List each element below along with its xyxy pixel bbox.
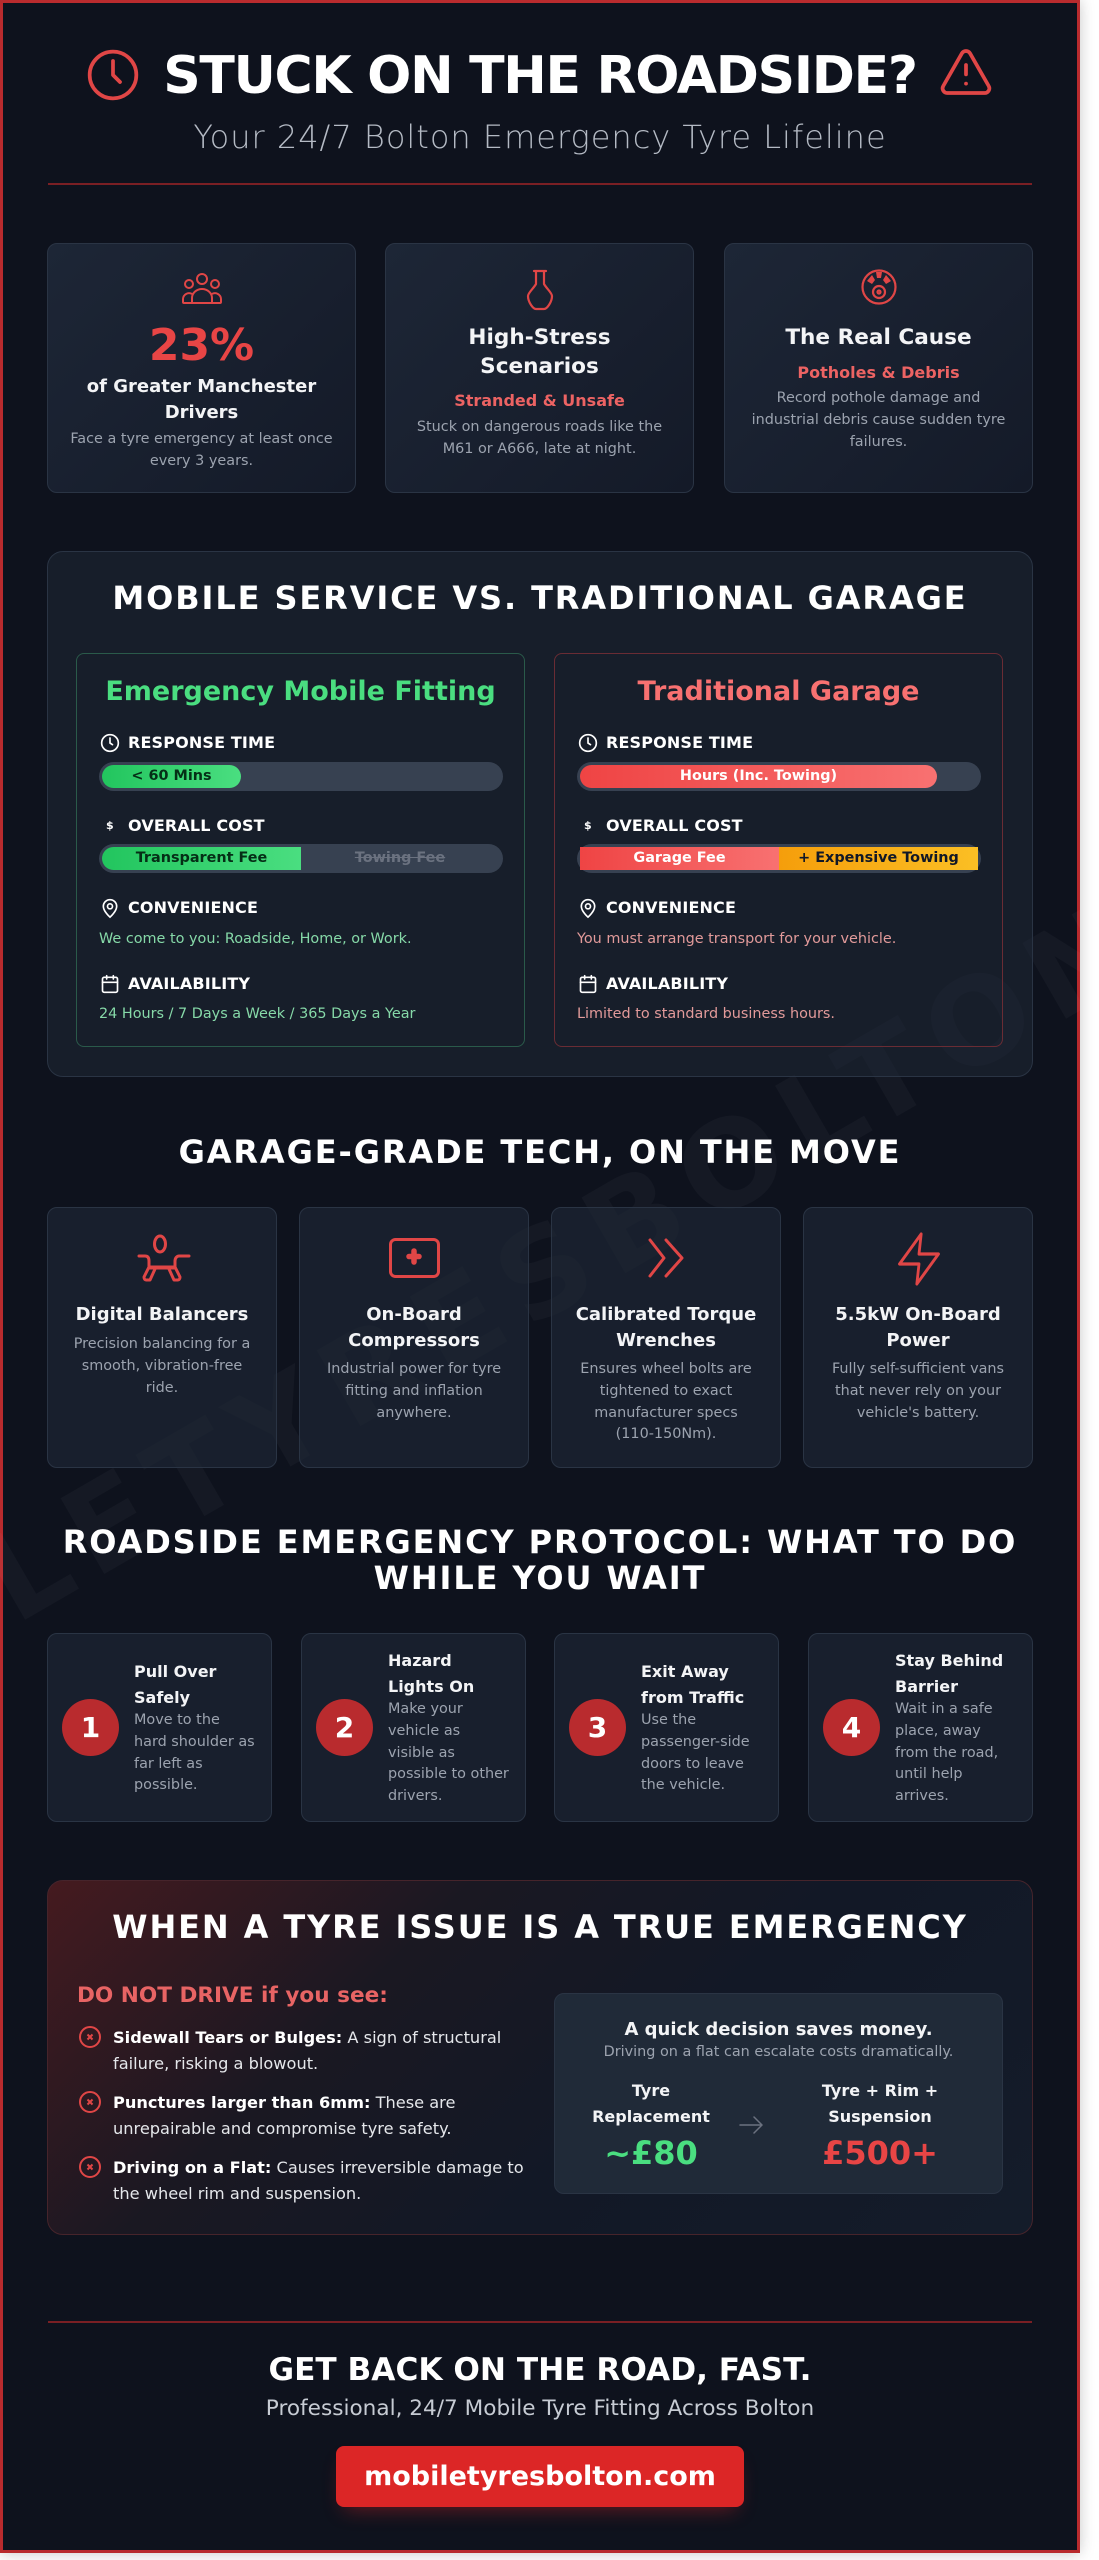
step description: Wait in a safe (895, 1701, 993, 1717)
bar: overall cost: Garage Fee (633, 850, 726, 866)
card description: industrial debris cause sudden tyre (752, 412, 1005, 428)
card title: The Real Cause (785, 325, 972, 350)
panel: stat card 23% (47, 243, 356, 493)
panel: step 2 (301, 1633, 526, 1822)
step number (316, 1699, 373, 1756)
label: convenience: CONVENIENCE (606, 898, 736, 917)
card title: Scenarios (480, 354, 599, 379)
feature title: Power (886, 1330, 950, 1351)
cost heading: A quick decision saves money. (624, 2019, 933, 2040)
card description: failures. (850, 434, 907, 450)
feature description (580, 1361, 752, 1442)
feature description: fitting and inflation (345, 1383, 483, 1399)
convenience text: We come to you: Roadside, Home, or Work. (99, 931, 412, 947)
panel: cost comparison (554, 1993, 1003, 2194)
step description: place, away (895, 1723, 981, 1739)
warning item 2: unrepairable and compromise tyre safety. (113, 2119, 451, 2138)
convenience text: You must arrange transport for your vehicle. (577, 931, 896, 947)
step description: visible as (388, 1745, 455, 1761)
column heading: Traditional Garage (638, 676, 919, 707)
footer (48, 2321, 1032, 2521)
bar: response time: Hours (Inc. Towing) (680, 768, 837, 784)
step title: Barrier (895, 1677, 958, 1696)
step title: Exit Away (641, 1662, 729, 1681)
cost after: Suspension (828, 2107, 932, 2126)
card description: Stuck on dangerous roads like the (417, 419, 662, 435)
step description: arrives. (895, 1788, 949, 1804)
footer heading: GET BACK ON THE ROAD, FAST. (268, 2352, 812, 2388)
panel: traditional garage (554, 653, 1003, 1047)
step title: Pull Over (134, 1662, 216, 1681)
bar: overall cost: Transparent Fee (136, 850, 267, 866)
feature title: Wrenches (616, 1330, 716, 1351)
feature description: anywhere. (376, 1405, 452, 1421)
footer divider (48, 2321, 1032, 2323)
step number: 3 (588, 1711, 607, 1744)
feature description: manufacturer specs (594, 1405, 738, 1421)
stat label: Drivers (165, 402, 238, 423)
panel: calibrated torque wrenches (551, 1207, 781, 1468)
feature description: Ensures wheel bolts are (580, 1361, 752, 1377)
step title: from Traffic (641, 1688, 744, 1707)
price high: £500+ (822, 2134, 938, 2172)
section heading: MOBILE SERVICE VS. TRADITIONAL GARAGE (112, 579, 968, 617)
card description (417, 419, 662, 457)
stat description: every 3 years. (150, 453, 253, 469)
step description: passenger-side (641, 1734, 750, 1750)
icon: compressor (389, 1238, 440, 1278)
section heading: protocol (63, 1523, 1017, 1597)
feature description: vehicle's battery. (857, 1405, 979, 1421)
panel: emergency mobile fitting (76, 653, 525, 1047)
step description: from the road, (895, 1745, 998, 1761)
feature description (74, 1336, 250, 1396)
feature description (832, 1361, 1004, 1421)
panel: the real cause (724, 243, 1033, 493)
header (48, 46, 1032, 185)
feature description: tightened to exact (600, 1383, 732, 1399)
cost after: Tyre + Rim + (822, 2081, 938, 2100)
bar: overall cost: Towing Fee (355, 850, 445, 866)
feature description: Precision balancing for a (74, 1336, 250, 1352)
label: overall cost: $ (106, 819, 114, 832)
icon: flask (526, 270, 554, 310)
icon: group (182, 273, 222, 304)
cost after (790, 2078, 970, 2175)
stat label: of Greater Manchester (87, 376, 316, 397)
step description: the vehicle. (641, 1777, 725, 1793)
feature description: (110-150Nm). (616, 1426, 716, 1442)
step number (569, 1699, 626, 1756)
warning item 3 (113, 2155, 543, 2206)
step title: Stay Behind (895, 1651, 1003, 1670)
footer subheading: Professional, 24/7 Mobile Tyre Fitting Across Bolton (266, 2396, 814, 2421)
subtitle: Your 24/7 Bolton Emergency Tyre Lifeline (193, 118, 887, 156)
step number: 4 (842, 1711, 861, 1744)
warning heading: DO NOT DRIVE if you see: (77, 1983, 388, 2008)
step description: drivers. (388, 1788, 442, 1804)
feature title (348, 1304, 480, 1351)
section heading: protocol: WHILE YOU WAIT (374, 1559, 706, 1597)
availability text: 24 Hours / 7 Days a Week / 365 Days a Year (99, 1006, 415, 1022)
card description: Record pothole damage and (777, 390, 980, 406)
card subtitle: Potholes & Debris (797, 363, 960, 382)
step title (134, 1662, 216, 1707)
panel: true emergency (47, 1880, 1033, 2235)
feature description: that never rely on your (835, 1383, 1001, 1399)
warning item 1: failure, risking a blowout. (113, 2054, 318, 2073)
label: overall cost: OVERALL COST (606, 816, 743, 835)
cost note: Driving on a flat can escalate costs dramatically. (604, 2044, 953, 2060)
panel: high-stress scenarios (385, 243, 694, 493)
label: convenience: CONVENIENCE (128, 898, 258, 917)
panel: on-board power (803, 1207, 1033, 1468)
icon: balancer (138, 1234, 190, 1282)
cost before: Replacement (592, 2107, 710, 2126)
feature description: ride. (146, 1380, 178, 1396)
label: overall cost: OVERALL COST (128, 816, 265, 835)
step description (388, 1701, 509, 1804)
feature description: Industrial power for tyre (327, 1361, 501, 1377)
icon: gauge (861, 269, 897, 305)
label: availability: AVAILABILITY (128, 974, 250, 993)
warning item 3: Driving on a Flat: Causes irreversible damage to (113, 2158, 524, 2177)
step description: until help (895, 1766, 963, 1782)
step number (62, 1699, 119, 1756)
card title: High-Stress (468, 325, 611, 350)
step description: Make your (388, 1701, 463, 1717)
cost before (561, 2078, 741, 2175)
feature title: Compressors (348, 1330, 480, 1351)
arrow (739, 2113, 763, 2137)
warning item 1: Sidewall Tears or Bulges: A sign of structural (113, 2028, 501, 2047)
panel: step 3 (554, 1633, 779, 1822)
label: response time: RESPONSE TIME (128, 733, 275, 752)
call to action (336, 2446, 744, 2507)
section heading: tech: GARAGE-GRADE TECH, ON THE MOVE (179, 1133, 901, 1171)
step description: Use the (641, 1712, 696, 1728)
column heading: Emergency Mobile Fitting (105, 676, 496, 707)
stat label (87, 376, 316, 423)
feature title: 5.5kW On-Board (835, 1304, 1001, 1325)
step description: far left as (134, 1756, 203, 1772)
label: overall cost: $ (584, 819, 592, 832)
warning item 1 (79, 2026, 501, 2073)
icon: warning triangle (940, 49, 992, 95)
warning item 3: the wheel rim and suspension. (113, 2184, 361, 2203)
step description (134, 1712, 255, 1793)
panel: comparison (47, 551, 1033, 1077)
step description (895, 1701, 998, 1804)
step title (895, 1651, 1003, 1696)
feature title (576, 1304, 756, 1351)
stat description (70, 431, 333, 469)
feature description: Fully self-sufficient vans (832, 1361, 1004, 1377)
step title: Safely (134, 1688, 190, 1707)
card description: M61 or A666, late at night. (443, 441, 636, 457)
step description: Move to the (134, 1712, 220, 1728)
step description: possible to other (388, 1766, 509, 1782)
feature title: Digital Balancers (76, 1304, 248, 1325)
panel: step 1 (47, 1633, 272, 1822)
availability text: Limited to standard business hours. (577, 1006, 835, 1022)
title: STUCK ON THE ROADSIDE? (163, 46, 917, 106)
section heading: protocol: ROADSIDE EMERGENCY PROTOCOL: WHAT TO DO (63, 1523, 1017, 1561)
step title: Hazard (388, 1651, 452, 1670)
step description: vehicle as (388, 1723, 460, 1739)
step description: hard shoulder as (134, 1734, 255, 1750)
label: response time: RESPONSE TIME (606, 733, 753, 752)
step number: 2 (335, 1711, 354, 1744)
step title (388, 1651, 474, 1696)
header divider (48, 183, 1032, 185)
step description: doors to leave (641, 1756, 744, 1772)
feature title (835, 1304, 1001, 1351)
panel: digital balancers (47, 1207, 277, 1468)
call to action: mobiletyresbolton.com (364, 2461, 716, 2492)
bar: overall cost (99, 844, 503, 873)
warning item 2: Punctures larger than 6mm: These are (113, 2093, 455, 2112)
bar: response time: < 60 Mins (131, 768, 212, 784)
icon: clock (88, 50, 138, 100)
step description (641, 1712, 750, 1793)
step number (823, 1699, 880, 1756)
warning item 2 (113, 2090, 543, 2141)
card subtitle: Stranded & Unsafe (454, 391, 625, 410)
feature description (327, 1361, 501, 1421)
icon: lightning bolt (898, 1232, 940, 1286)
card title (468, 325, 611, 379)
step title: Lights On (388, 1677, 474, 1696)
panel: on-board compressors (299, 1207, 529, 1468)
step description: possible. (134, 1777, 198, 1793)
card description (752, 390, 1005, 450)
bar: overall cost (577, 844, 981, 873)
bar: overall cost: + Expensive Towing (798, 850, 959, 866)
feature title: Calibrated Torque (576, 1304, 756, 1325)
feature description: smooth, vibration-free (82, 1358, 242, 1374)
bar: response time (99, 762, 503, 791)
section heading: WHEN A TYRE ISSUE IS A TRUE EMERGENCY (112, 1908, 968, 1946)
feature title: On-Board (366, 1304, 462, 1325)
stat description: Face a tyre emergency at least once (70, 431, 333, 447)
bar: response time (577, 762, 981, 791)
panel: step 4 (808, 1633, 1033, 1822)
price low: ~£80 (604, 2134, 698, 2172)
step number: 1 (81, 1711, 100, 1744)
cost before: Tyre (632, 2081, 670, 2100)
big number: 23% (149, 320, 254, 371)
step title (641, 1662, 744, 1707)
icon: double chevron (648, 1238, 684, 1278)
label: availability: AVAILABILITY (606, 974, 728, 993)
